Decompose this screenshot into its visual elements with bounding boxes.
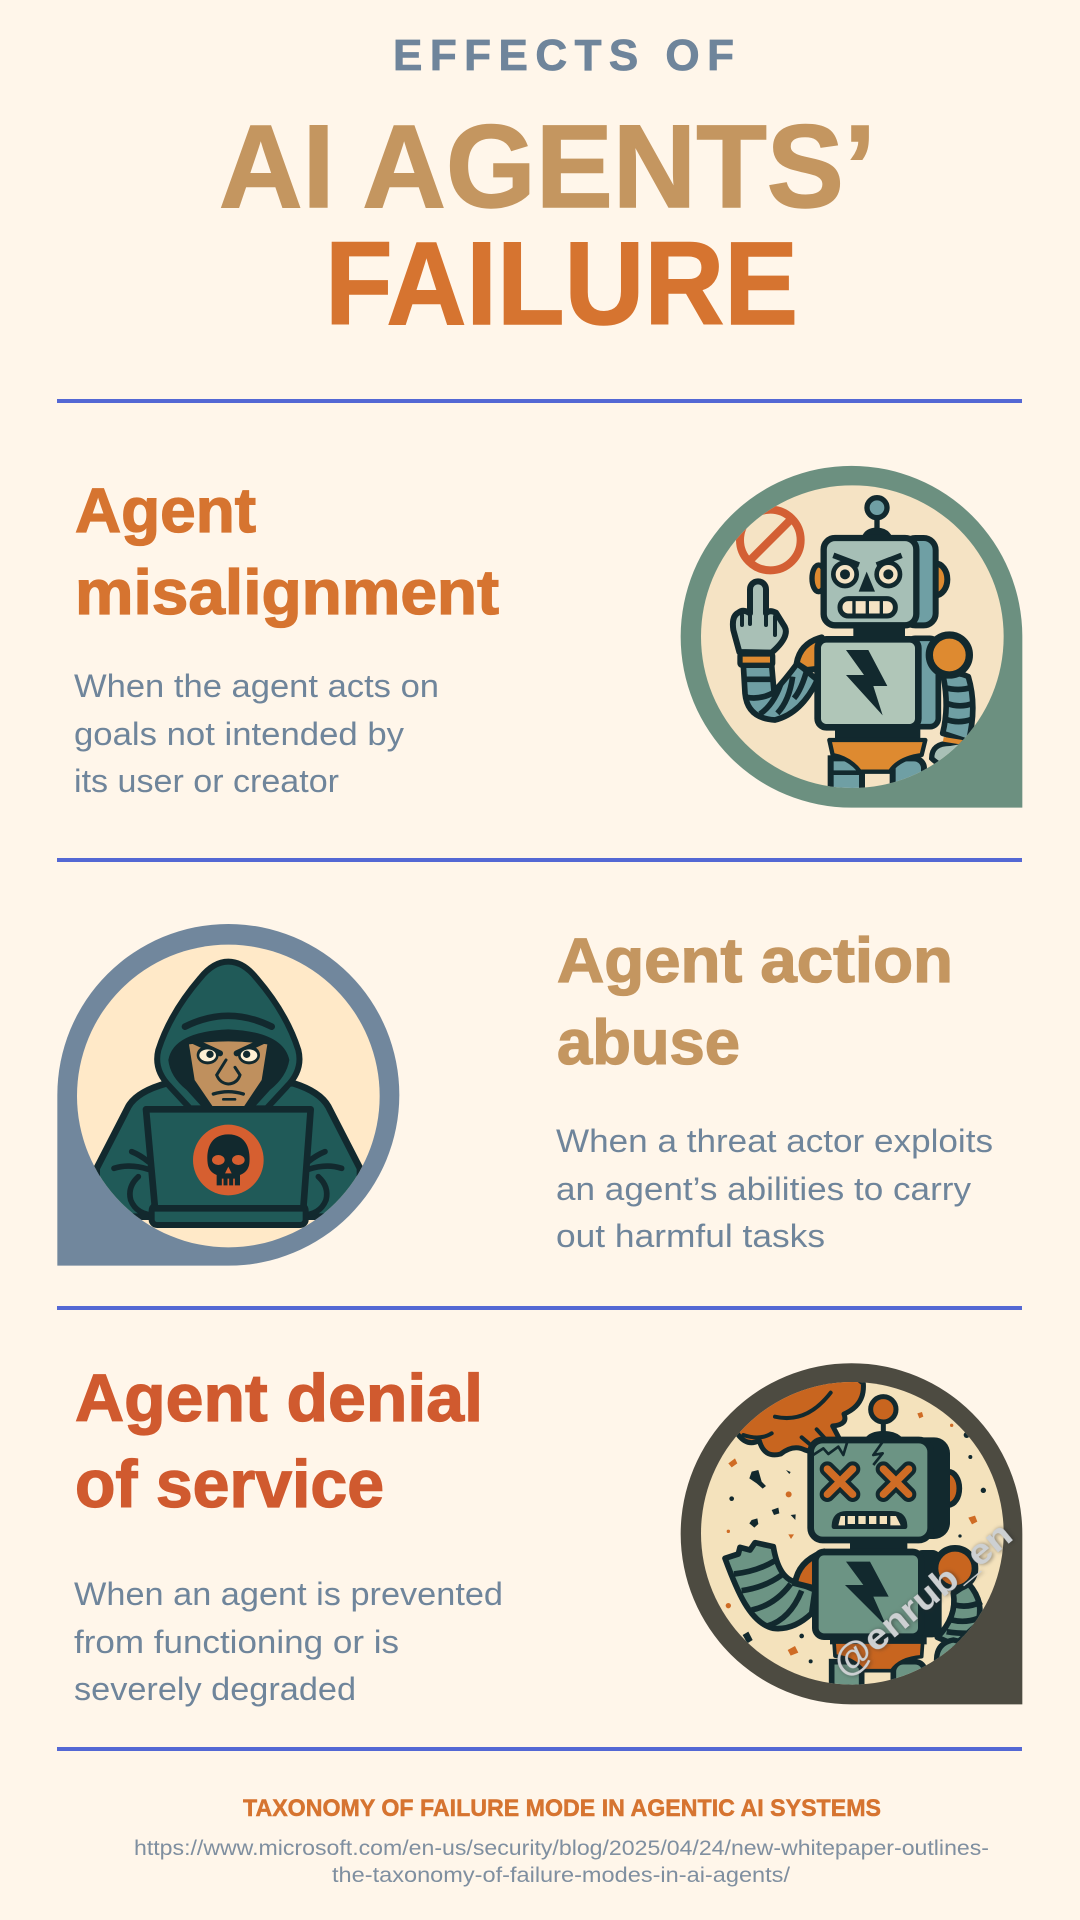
title: [219, 31, 876, 350]
description: When a threat actor exploits: [556, 1123, 993, 1159]
right arm: [937, 1583, 982, 1645]
antenna: [865, 1397, 903, 1438]
heading: Agent: [75, 476, 256, 546]
debris particles: [729, 1432, 986, 1663]
heading: abuse: [557, 1008, 740, 1078]
laptop: [152, 1205, 306, 1225]
head: [903, 538, 936, 625]
title line: AI agents: AI AGENTS’: [219, 101, 876, 233]
icon: angry robot with prohibition sign: [681, 466, 1022, 808]
mouth: [834, 1513, 905, 1527]
title line: failure: FAILURE: [325, 218, 798, 350]
hips and legs: [830, 1636, 927, 1644]
lightning bolt: [845, 1562, 889, 1627]
description: from functioning or is: [74, 1624, 399, 1660]
x eyes: [827, 1469, 909, 1494]
right shoulder: [929, 635, 969, 675]
icon: hooded hacker at laptop: [57, 924, 399, 1266]
heading: Agent denial: [75, 1361, 483, 1436]
heading: Agent action: [557, 926, 953, 996]
hoodie body: [97, 1083, 360, 1217]
head: [922, 1437, 950, 1539]
teardrop frame: [57, 924, 399, 1266]
description: goals not intended by: [74, 716, 404, 752]
description: out harmful tasks: [556, 1218, 825, 1254]
explosion cloud: [736, 1382, 866, 1458]
panel: agent denial of service text: [74, 1361, 503, 1707]
hood: [157, 962, 299, 1108]
cracks: [814, 1443, 884, 1466]
broken left arm: [725, 1543, 815, 1629]
antenna: [862, 498, 892, 537]
source link: https://www.microsoft.com/en-us/security/blog/2025/04/24/new-whitepaper-outlines-: [134, 1837, 989, 1860]
description: severely degraded: [74, 1671, 356, 1707]
right hand: [932, 740, 968, 767]
torso: [919, 1550, 942, 1638]
lightning bolt: [846, 650, 887, 715]
left ear: [812, 565, 825, 592]
title kicker: EFFECTS OF: [393, 31, 734, 80]
description: an agent’s abilities to carry: [556, 1171, 971, 1207]
watermark: @enrub_en: [824, 1513, 1020, 1685]
right ear: [938, 560, 950, 598]
teardrop frame: [681, 1363, 1022, 1704]
teardrop frame: [681, 466, 1022, 808]
panel: agent action abuse text: [556, 926, 993, 1254]
right arm: [943, 674, 973, 742]
hands: [114, 1152, 342, 1215]
description: When an agent is prevented: [74, 1576, 503, 1612]
waist and hips: [835, 730, 920, 738]
icon: broken robot with explosion: [681, 1363, 1022, 1704]
neck: [850, 1543, 908, 1549]
panel: agent misalignment text: [74, 476, 499, 799]
heading: of service: [75, 1447, 384, 1522]
skull badge: [193, 1125, 264, 1195]
wrist cuff: [740, 654, 773, 665]
source title: TAXONOMY OF FAILURE MODE IN AGENTIC AI SYSTEMS: [243, 1795, 881, 1822]
angry face: [833, 555, 902, 616]
ear: [950, 1469, 962, 1508]
hand: [733, 581, 786, 653]
source link: the-taxonomy-of-failure-modes-in-ai-agents/: [332, 1864, 790, 1887]
heading: misalignment: [75, 558, 499, 628]
description: When the agent acts on: [74, 668, 439, 704]
description: its user or creator: [74, 763, 339, 799]
shoulder: [935, 1548, 975, 1588]
torso: [907, 638, 938, 727]
neck: [853, 628, 905, 636]
prohibition sign: [740, 510, 801, 570]
raised left arm: [743, 663, 817, 720]
face: [189, 1041, 267, 1107]
source footer: [134, 1795, 989, 1887]
